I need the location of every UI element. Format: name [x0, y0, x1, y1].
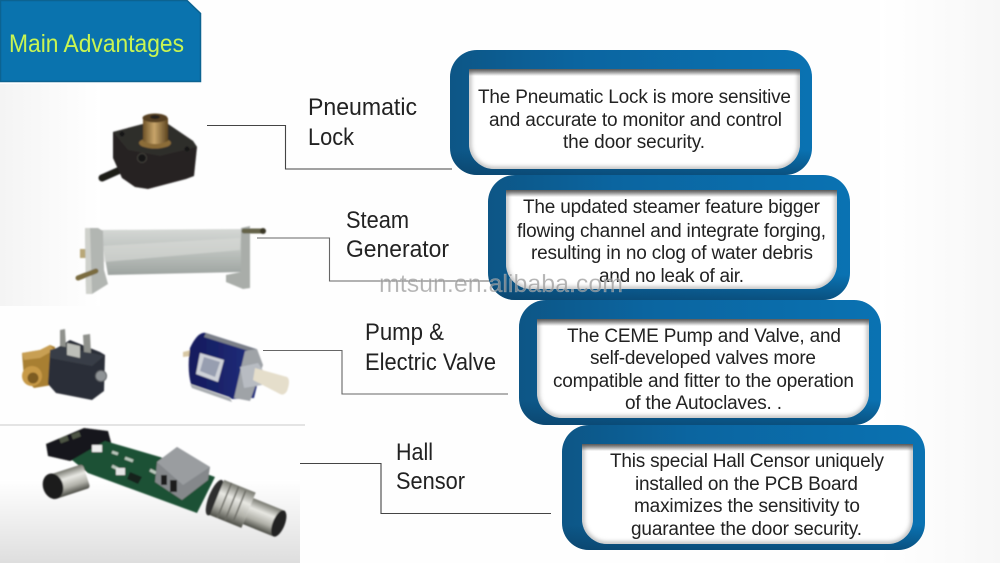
- panel: Hall Sensor description: [562, 425, 925, 550]
- image: hall sensor board: [0, 424, 305, 563]
- connector line: Hall Sensor: [300, 464, 551, 514]
- label: Steam Generator: Generator: [346, 236, 449, 263]
- description text: the door security.: [563, 132, 705, 153]
- connector line: Pneumatic Lock: [207, 126, 452, 169]
- description text: This special Hall Censor uniquely: [610, 451, 884, 472]
- label: Steam Generator: Steam: [346, 207, 409, 234]
- label: Pump and Electric Valve: Pump &: [365, 319, 444, 346]
- description text: self-developed valves more: [590, 348, 816, 369]
- label: Pneumatic Lock: Lock: [308, 124, 355, 151]
- image: pneumatic lock: [102, 114, 197, 189]
- description text: [610, 451, 884, 540]
- image: electric valve: [22, 329, 106, 400]
- banner title: Main Advantages: [9, 30, 184, 58]
- label: Hall Sensor: Sensor: [396, 468, 465, 495]
- panel: Pump and Electric Valve description: [519, 300, 881, 425]
- description text: compatible and fitter to the operation: [553, 371, 854, 392]
- label: Hall Sensor: Hall: [396, 439, 433, 466]
- description text: maximizes the sensitivity to: [634, 496, 860, 517]
- label: Pneumatic Lock: Pneumatic: [308, 94, 417, 121]
- description text: installed on the PCB Board: [635, 474, 858, 495]
- connector line: Steam Generator: [257, 238, 492, 281]
- description text: flowing channel and integrate forging,: [517, 221, 826, 242]
- banner: Main Advantages: [0, 0, 200, 82]
- label: Pump and Electric Valve: Electric Valve: [365, 349, 496, 376]
- panel: Steam Generator description: [488, 175, 850, 300]
- description text: The updated steamer feature bigger: [523, 197, 821, 218]
- description text: [478, 87, 791, 153]
- description text: [517, 197, 826, 287]
- description text: and no leak of air.: [599, 266, 744, 287]
- description text: [553, 326, 854, 414]
- watermark: mtsun.en.alibaba.com: [379, 270, 623, 298]
- label: Pneumatic Lock: [308, 94, 417, 151]
- description text: and accurate to monitor and control: [489, 110, 782, 131]
- description text: of the Autoclaves. .: [625, 393, 782, 414]
- panel: Pneumatic Lock description: [450, 50, 812, 175]
- image: pump: [183, 333, 289, 402]
- description text: resulting in no clog of water debris: [531, 243, 813, 264]
- label: Pump and Electric Valve: [365, 319, 496, 376]
- image: steam generator: [78, 226, 266, 294]
- description text: guarantee the door security.: [631, 519, 862, 540]
- label: Hall Sensor: [396, 439, 465, 495]
- label: Steam Generator: [346, 207, 449, 263]
- description text: The CEME Pump and Valve, and: [567, 326, 841, 347]
- connector line: Pump and Electric Valve: [263, 350, 508, 394]
- description text: The Pneumatic Lock is more sensitive: [478, 87, 791, 108]
